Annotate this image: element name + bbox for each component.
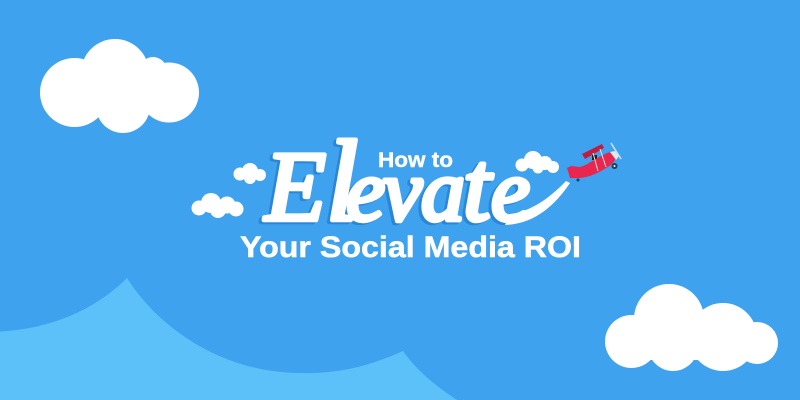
- script word shadow: l: [323, 120, 355, 248]
- cloud: top left: [40, 39, 199, 133]
- script word: Elevate: a: [421, 143, 465, 240]
- cloud: bottom right: [605, 284, 778, 371]
- script word: Elevate: t: [463, 131, 493, 242]
- script word: Elevate: v: [383, 143, 423, 240]
- cloud: small lower left of title: [192, 193, 244, 218]
- script word: Elevate: e: [491, 143, 530, 240]
- script word shadow: t: [460, 133, 490, 244]
- script word shadow: E: [260, 133, 323, 244]
- script word: Elevate: e: [346, 143, 385, 240]
- heading: Your Social Media ROI: Your Social Media ROI: [240, 231, 581, 264]
- script word shadow: a: [418, 145, 462, 242]
- smoke trail from plane: [505, 181, 570, 225]
- cloud: small upper left of title: [234, 163, 266, 184]
- background hills: [0, 278, 457, 400]
- heading: How to: How to: [378, 149, 453, 172]
- script word shadow: e: [343, 145, 382, 242]
- script word: Elevate: l: [326, 118, 358, 246]
- script word: Elevate: E: [263, 131, 326, 242]
- script word shadow: v: [380, 145, 420, 242]
- script word shadow: e: [488, 145, 527, 242]
- cloud: small right of title: [516, 151, 559, 174]
- icon: red biplane: [567, 143, 621, 182]
